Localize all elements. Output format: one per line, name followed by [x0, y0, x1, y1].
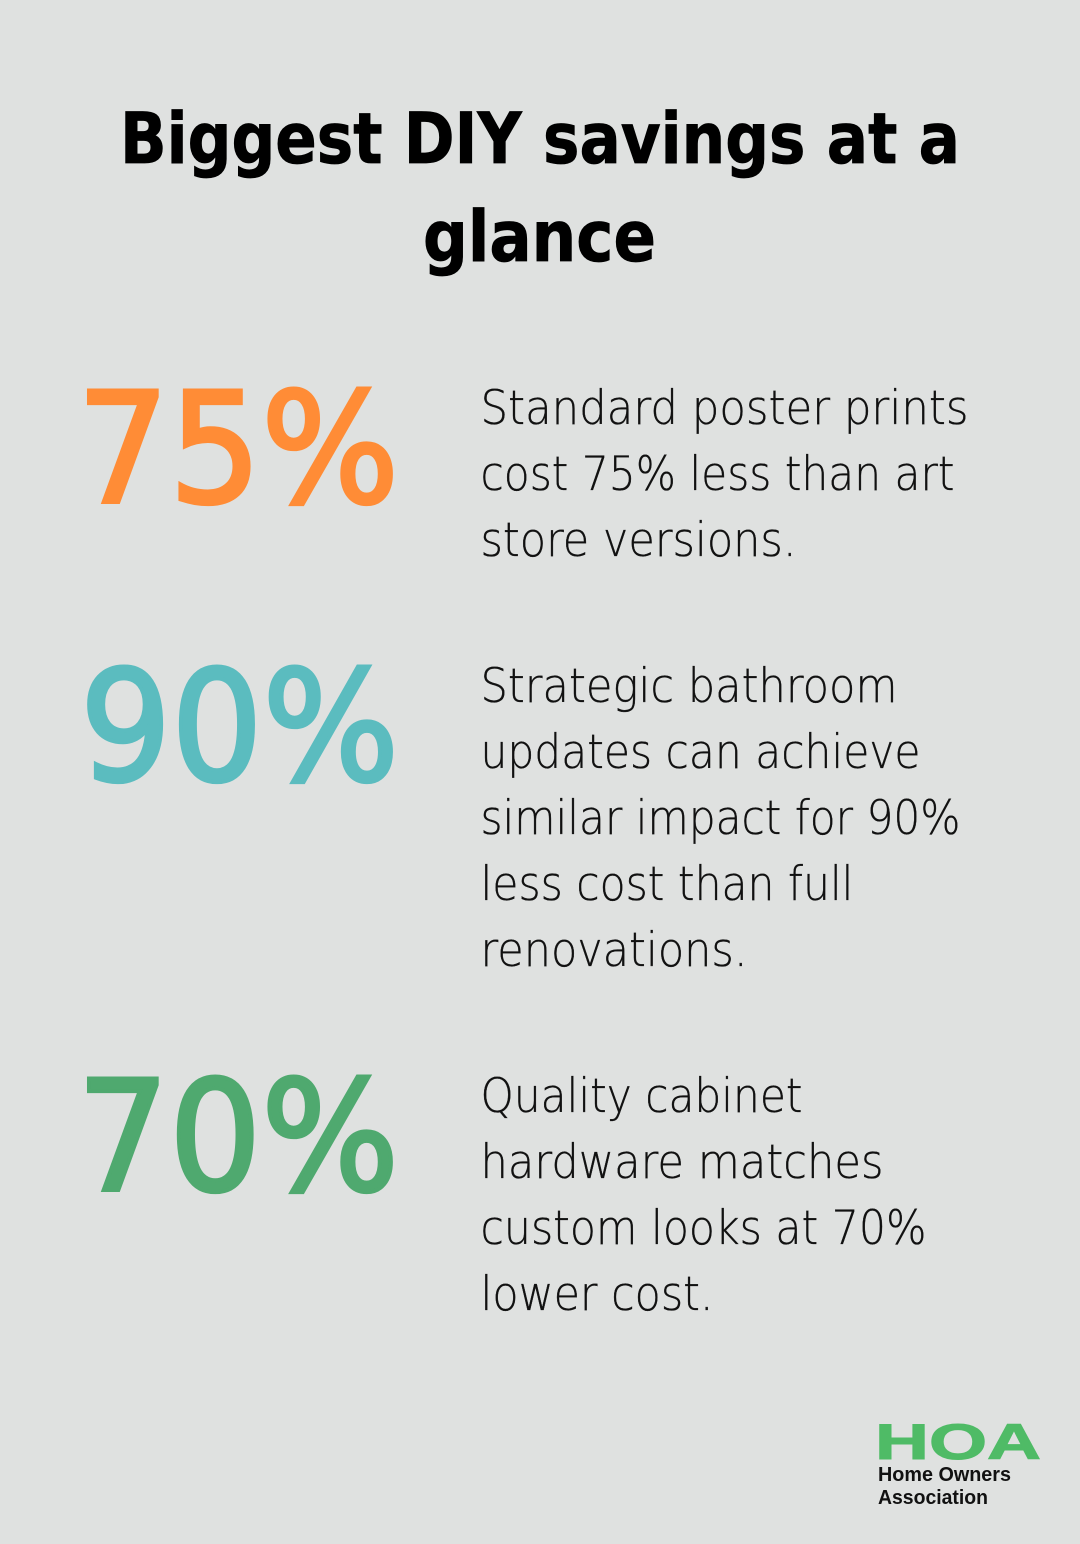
stat description: cabinet hardware: hardware matches — [480, 1135, 884, 1190]
stat description: bathroom updates: updates can achieve — [480, 725, 920, 780]
stat: 75% — [77, 361, 968, 568]
title: Biggest DIY savings at a — [120, 98, 960, 180]
stat description: cabinet hardware: custom looks at 70% — [480, 1201, 926, 1256]
stat description: poster prints — [480, 381, 968, 568]
stat description: poster prints: Standard poster prints — [480, 381, 968, 436]
logo: HOA Home Owners Association: Association — [878, 1487, 988, 1509]
title: glance — [423, 196, 656, 278]
stat: 70% — [77, 1049, 926, 1322]
logo: HOA Home Owners Association: HOA — [875, 1414, 1041, 1470]
stat description: poster prints: store versions. — [480, 513, 796, 568]
title — [120, 98, 960, 278]
stat: 90% — [80, 639, 960, 978]
stat description: cabinet hardware: lower cost. — [480, 1267, 714, 1322]
stat description: bathroom updates: similar impact for 90% — [480, 791, 960, 846]
stat description: bathroom updates: renovations. — [480, 923, 748, 978]
stat description: poster prints: cost 75% less than art — [480, 447, 954, 502]
stat value: 90%: 90% — [80, 639, 399, 817]
stat description: cabinet hardware — [480, 1069, 926, 1322]
logo: HOA Home Owners Association: Home Owners — [878, 1464, 1011, 1486]
stat value: 70%: 70% — [77, 1049, 399, 1227]
stat description: cabinet hardware: Quality cabinet — [480, 1069, 802, 1124]
logo: HOA Home Owners Association — [875, 1414, 1041, 1509]
stat description: bathroom updates: Strategic bathroom — [480, 659, 898, 714]
stat value: 75%: 75% — [77, 361, 399, 539]
stat description: bathroom updates — [480, 659, 960, 978]
stat description: bathroom updates: less cost than full — [480, 857, 854, 912]
